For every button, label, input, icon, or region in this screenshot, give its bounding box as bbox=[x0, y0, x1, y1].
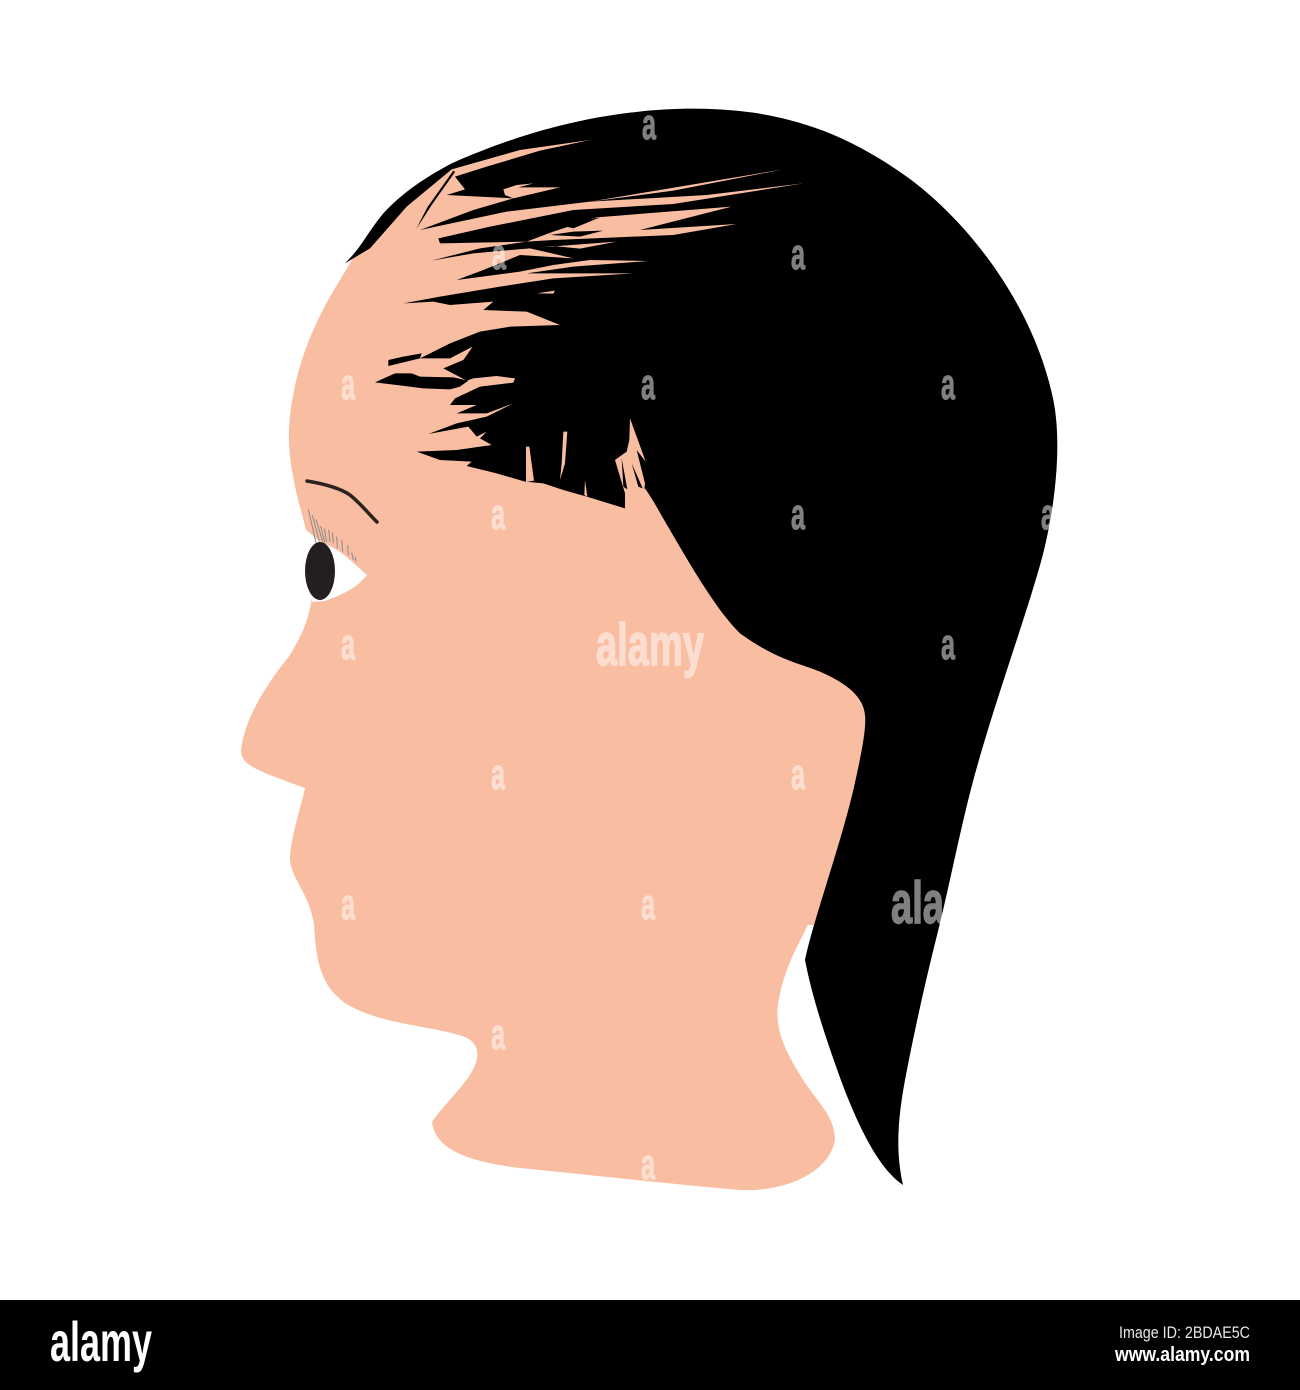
footer bar bbox=[0, 1300, 1300, 1390]
watermark grid: a bbox=[941, 620, 955, 669]
website: www.alamy.com bbox=[1114, 1344, 1250, 1366]
illustration: head profile with receding hair bbox=[241, 109, 1057, 1190]
watermark grid: a bbox=[791, 750, 805, 799]
eye bbox=[305, 509, 367, 602]
watermark grid: a bbox=[341, 620, 355, 669]
watermark grid: a bbox=[641, 880, 655, 929]
right watermark fragment: ala bbox=[891, 870, 945, 936]
footer logo: alamy bbox=[50, 1310, 152, 1373]
bare scalp streaks bbox=[503, 169, 783, 508]
face and neck silhouette bbox=[241, 130, 900, 1190]
dark hair strands over the scalp bbox=[375, 171, 643, 489]
eyelashes bbox=[308, 509, 356, 562]
center watermark: alamy bbox=[596, 612, 704, 678]
image id: Image ID: 2BDAE5C bbox=[1119, 1323, 1250, 1342]
watermark grid: a bbox=[341, 360, 355, 409]
watermark grid: a bbox=[641, 1140, 655, 1189]
watermark grid: a bbox=[641, 360, 655, 409]
watermark grid: a bbox=[341, 880, 355, 929]
watermark grid: a bbox=[791, 490, 805, 539]
watermark grid: a bbox=[642, 100, 656, 149]
eye white bbox=[306, 530, 367, 602]
watermark grid: a bbox=[791, 230, 805, 279]
watermark grid: a bbox=[491, 490, 505, 539]
watermark grid: a bbox=[492, 230, 506, 279]
hair bbox=[345, 109, 1057, 1185]
watermark grid: a bbox=[1041, 490, 1055, 539]
hair mass with jagged hairline bbox=[345, 109, 1057, 1185]
watermark grid: a bbox=[491, 750, 505, 799]
pupil bbox=[305, 542, 335, 600]
eyebrow bbox=[307, 481, 377, 522]
watermark grid: a bbox=[941, 360, 955, 409]
watermark grid bbox=[341, 100, 1055, 1189]
watermark grid: a bbox=[491, 1010, 505, 1059]
